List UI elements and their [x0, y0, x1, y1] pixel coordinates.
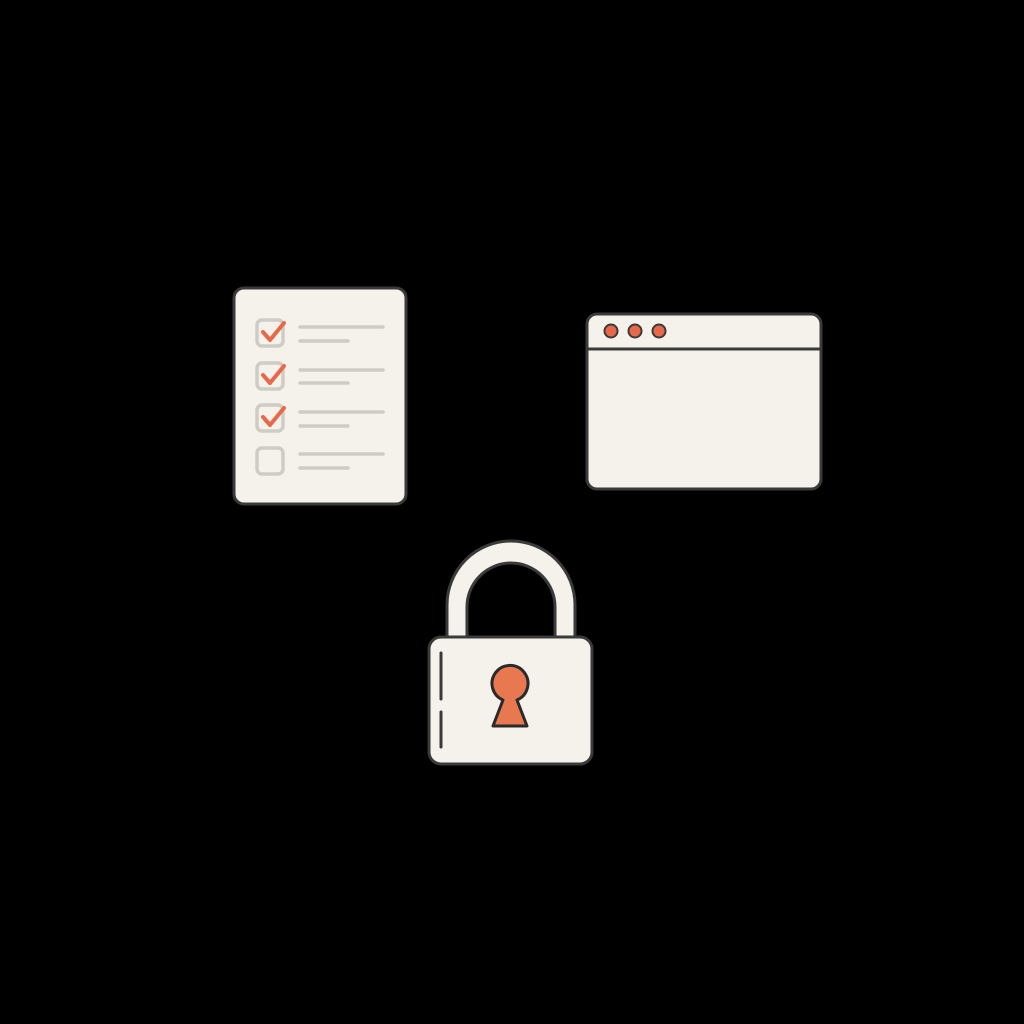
icon: checklist [234, 288, 406, 504]
icon: browser window [587, 314, 821, 489]
icon: padlock [429, 541, 592, 764]
